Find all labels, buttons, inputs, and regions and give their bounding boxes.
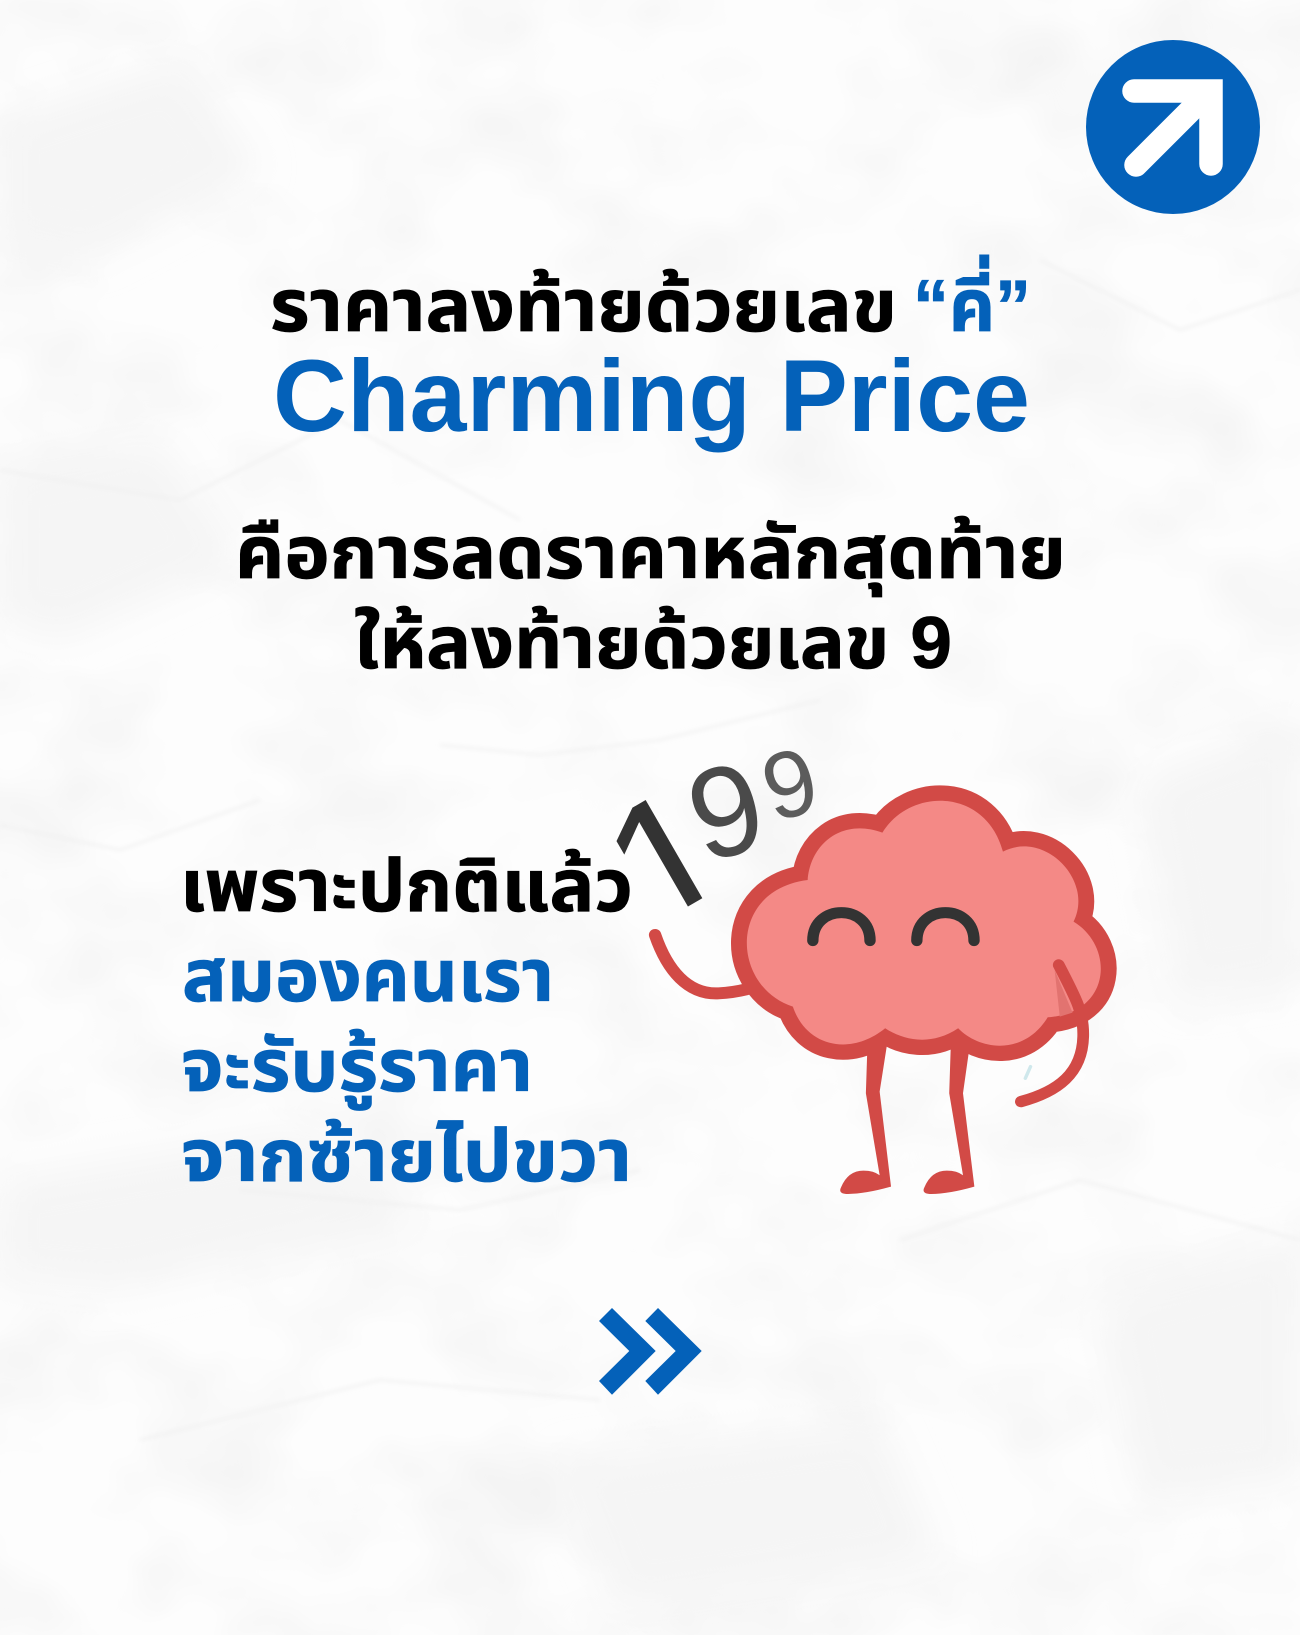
icon: double chevron next arrow xyxy=(599,1308,702,1395)
floating digits: 1 9 9: 1 xyxy=(570,744,766,979)
brain body xyxy=(747,801,1101,1046)
explanation text block xyxy=(180,846,633,1197)
right arm xyxy=(1021,965,1083,1102)
left arm xyxy=(655,935,746,993)
illustration: smiling brain character xyxy=(655,801,1101,1194)
arm shadow xyxy=(1055,970,1073,1017)
subtitle text block: คือการลดราคาหลักสุดท้าย xyxy=(235,513,1066,597)
explanation text block: จะรับรู้ราคา xyxy=(181,1026,533,1110)
left leg xyxy=(840,1030,891,1194)
title line: Thai heading with blue keyword xyxy=(270,255,1031,347)
explanation text block: จากซ้ายไปขวา xyxy=(181,1116,632,1197)
floating digits: 1 9 9 xyxy=(616,751,813,906)
subtitle text block xyxy=(235,513,1066,684)
sweat mark xyxy=(1025,1067,1030,1078)
logo: blue circle with up-right arrow xyxy=(1086,40,1260,214)
right eye xyxy=(917,913,974,941)
right leg xyxy=(924,1030,974,1194)
floating digits: 1 9 9: 9 xyxy=(673,733,779,890)
title line: Thai heading with blue keyword: ราคาลงท้ายด้วยเลข xyxy=(270,266,897,347)
subtitle text block: ให้ลงท้ายด้วยเลข 9 xyxy=(354,603,952,684)
floating digits: 1 9 9: 9 xyxy=(751,726,829,841)
title: Charming Price: Charming Price xyxy=(273,339,1030,453)
left eye xyxy=(813,913,870,941)
title line: Thai heading with blue keyword: “คี่” xyxy=(913,255,1031,347)
explanation text block: สมองคนเรา xyxy=(182,936,554,1017)
explanation text block: เพราะปกติแล้ว xyxy=(180,846,633,927)
